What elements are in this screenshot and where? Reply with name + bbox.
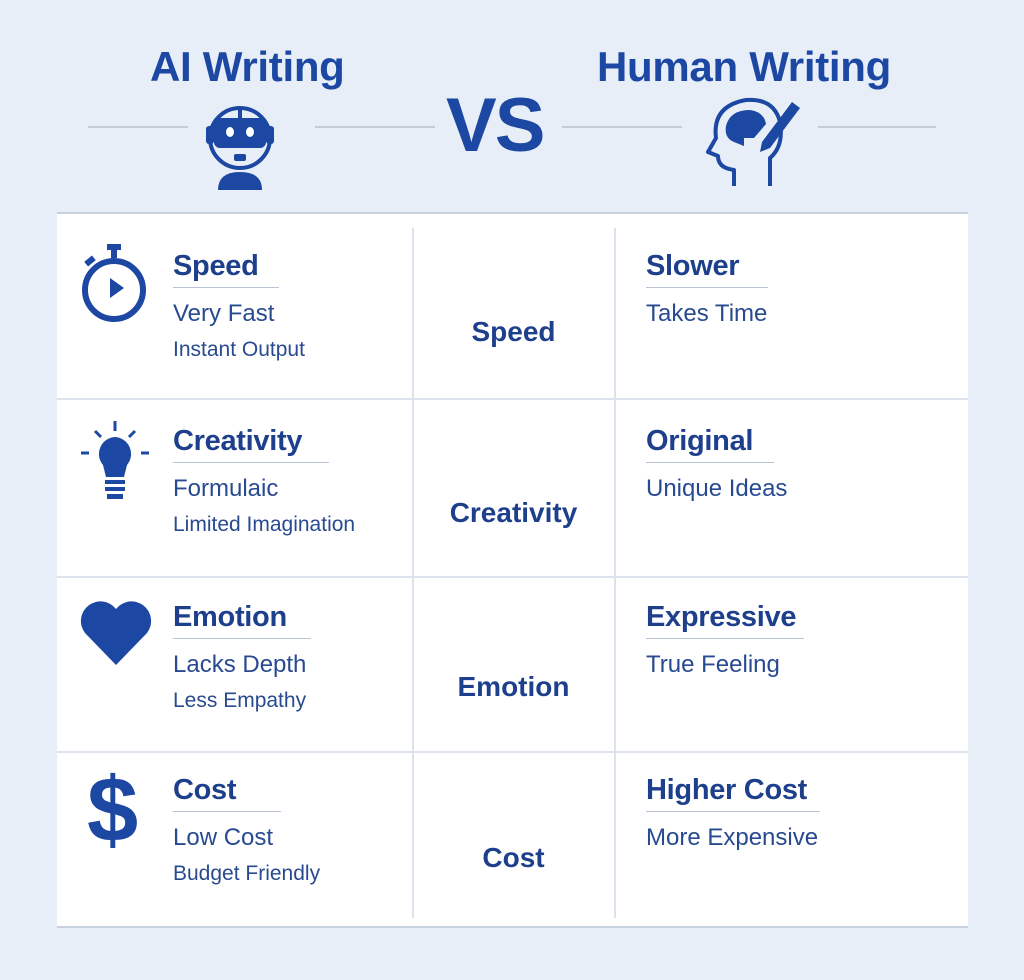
label: Speed: Speed	[471, 316, 556, 347]
icon: lightbulb	[81, 421, 149, 499]
text: AI emotion	[173, 601, 311, 712]
text: AI speed: Speed	[173, 250, 259, 282]
label: Emotion: Emotion	[458, 671, 570, 702]
text: AI cost: Low Cost	[173, 824, 273, 851]
text: AI cost: Budget Friendly	[173, 862, 320, 885]
text: human emotion: Expressive	[646, 601, 796, 633]
text: AI emotion: Less Empathy	[173, 689, 306, 712]
row: cost	[87, 759, 820, 885]
text: AI creativity: Creativity	[173, 425, 302, 457]
text: AI speed: Instant Output	[173, 338, 305, 361]
text: human speed: Takes Time	[646, 300, 767, 327]
panel: comparison table	[57, 212, 968, 928]
icon: stopwatch	[82, 244, 146, 322]
icon: robot	[206, 106, 274, 190]
text: human emotion	[646, 601, 804, 678]
text: AI creativity: Formulaic	[173, 475, 278, 502]
text: human emotion: True Feeling	[646, 651, 780, 678]
text: human creativity: Unique Ideas	[646, 475, 787, 502]
text: human creativity: Original	[646, 425, 753, 457]
icon: human head with pencil	[706, 98, 800, 186]
text: human cost: More Expensive	[646, 824, 818, 851]
row: emotion	[80, 601, 804, 712]
icon: heart	[80, 601, 152, 665]
text: human cost: Higher Cost	[646, 774, 807, 806]
label: Creativity: Creativity	[450, 497, 577, 528]
title: Human Writing: Human Writing	[597, 43, 891, 90]
text: AI emotion: Lacks Depth	[173, 651, 306, 678]
row: speed	[82, 244, 768, 361]
text: AI speed	[173, 250, 305, 361]
text: human speed	[646, 250, 768, 327]
row: creativity	[81, 421, 787, 536]
text: AI cost	[173, 774, 320, 885]
VS heading: VS	[446, 83, 543, 168]
icon: dollar: $	[87, 759, 138, 861]
text: human cost	[646, 774, 820, 851]
text: AI emotion: Emotion	[173, 601, 287, 633]
text: AI creativity: Limited Imagination	[173, 513, 355, 536]
label: Cost: Cost	[482, 842, 545, 873]
title: AI Writing: AI Writing	[150, 43, 345, 90]
text: human speed: Slower	[646, 250, 739, 282]
text: AI cost: Cost	[173, 774, 236, 806]
text: AI creativity	[173, 425, 355, 536]
text: human creativity	[646, 425, 787, 502]
text: AI speed: Very Fast	[173, 300, 274, 327]
